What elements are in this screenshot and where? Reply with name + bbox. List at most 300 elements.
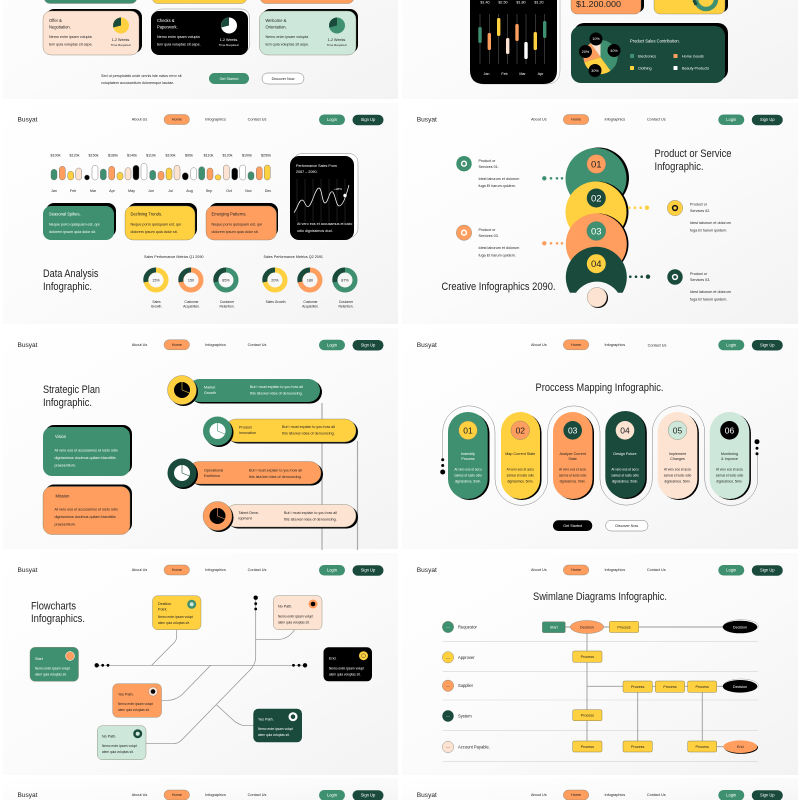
item: services 02: Product or bbox=[690, 202, 708, 206]
donut group: Q1 2090: Sales Performance Metrics Q1 2090 bbox=[144, 255, 203, 259]
candlestick chart bbox=[478, 14, 546, 64]
card: yes path orange bbox=[113, 684, 162, 717]
bar value labels: $120k bbox=[222, 154, 233, 158]
pie chart: 30% bbox=[591, 69, 599, 73]
card: yes path dark: atem quia voluptas sit. bbox=[258, 733, 290, 737]
card: checks and paperwork: Nemo enim ipsam volupta bbox=[157, 35, 201, 39]
bar value labels: $180k bbox=[108, 154, 118, 158]
nav: row 3 right: Contact Us bbox=[648, 343, 666, 347]
card: offer and negotiation: Nemo enim ipsam volupta bbox=[49, 35, 93, 39]
nav: row 4 left: Home bbox=[172, 568, 182, 572]
card: start: atem quia voluptas sit. bbox=[35, 672, 67, 676]
pill 02: dignissimos. 5min. bbox=[507, 480, 534, 484]
card: no path mint: No Path. bbox=[102, 734, 116, 738]
card: yes path orange: Nemo enim ipsam volupt bbox=[118, 702, 153, 706]
serpentine connector bbox=[440, 406, 760, 506]
item: services 02: fuga Et harum quidem. bbox=[690, 228, 727, 232]
pill 03: At vero eos et accu bbox=[559, 468, 587, 472]
panel: hiring steps slide bbox=[43, 0, 358, 85]
card: no path mint bbox=[97, 726, 146, 760]
item: services 03: fuga Et harum quidem. bbox=[478, 253, 516, 257]
panel: product sales contribution bbox=[571, 23, 728, 83]
panel: flowcharts slide bbox=[30, 596, 372, 760]
swimlane nodes: Process bbox=[581, 745, 594, 749]
text block: call to action copy bbox=[101, 74, 182, 85]
pill 04: At vero eos et accu bbox=[611, 468, 639, 472]
nav: row 2 right: Infographics bbox=[604, 118, 625, 122]
nav: row 2 right: Home bbox=[571, 118, 581, 122]
panel: swimlane slide bbox=[442, 591, 758, 761]
nav: row 4 left: About Us bbox=[132, 568, 147, 572]
item: services 01: Services 01. bbox=[478, 165, 499, 169]
title: strategic plan: Infographic. bbox=[43, 397, 92, 409]
pill 01: dignissimos. 5min. bbox=[455, 480, 481, 484]
month labels: Jul bbox=[168, 189, 173, 193]
card: welcome and orientation: Nemo enim ipsam volupta bbox=[266, 35, 309, 39]
row: talent development: But I must explain to you how all bbox=[284, 511, 337, 515]
donut group: Q1 2090: Retention. bbox=[219, 304, 235, 308]
title: product or service: Product or Service bbox=[654, 148, 732, 160]
legend: Product Sales Contribution. bbox=[630, 38, 680, 44]
bar value labels: $100k bbox=[242, 154, 252, 158]
nav: row 5 left: Busyat bbox=[18, 792, 38, 799]
card: welcome and orientation: Orientation. bbox=[266, 24, 287, 30]
card: no path mint: atem quia voluptas sit. bbox=[102, 750, 134, 754]
donut group: Q1 2090: Growth. bbox=[151, 304, 162, 308]
pill 05: dignissimos. 5min. bbox=[664, 480, 691, 484]
nav: row 5 right: Contact Us bbox=[647, 793, 666, 797]
text block: call to action copy: voluptatem accusantium doloremque laudan. bbox=[101, 81, 174, 85]
month labels: Jan bbox=[51, 189, 57, 193]
card: decision point: atem quia voluptas sit. bbox=[158, 621, 190, 625]
swimlane nodes: Process bbox=[696, 685, 709, 689]
month labels: Sep bbox=[206, 189, 212, 193]
donut group: Q2 2091: 20% bbox=[271, 278, 279, 282]
title: creative infographics: Creative Infographics 2090. bbox=[442, 281, 556, 293]
card: decision point: Desition bbox=[158, 602, 171, 606]
card: no path peach: No Path. bbox=[278, 604, 292, 608]
month labels: Feb bbox=[70, 189, 76, 193]
price labels bbox=[480, 0, 544, 4]
pill 03 bbox=[553, 412, 594, 500]
card: no path peach: atem quia voluptas sit. bbox=[278, 620, 310, 624]
nav: row 4 left: Sign Up bbox=[361, 568, 376, 573]
card: yes path orange: Yes Path. bbox=[118, 692, 134, 696]
nav: row 5 right: Login bbox=[726, 792, 737, 798]
pill 01: samus et iusto odio bbox=[454, 474, 482, 478]
title: data analysis: Data Analysis bbox=[43, 268, 99, 280]
circle stack: 01 bbox=[591, 160, 602, 170]
card: performance sales line chart: Performance Sales From bbox=[296, 164, 337, 168]
card: offer and negotiation bbox=[43, 9, 142, 55]
month labels: Feb bbox=[501, 72, 508, 76]
card: offer and negotiation: tem quia voluptas sit aspe. bbox=[49, 42, 93, 46]
donut group: Q1 2090: Sales bbox=[152, 300, 161, 304]
legend: Clothing bbox=[638, 66, 652, 70]
lane: account payable bbox=[442, 741, 490, 753]
nav: row 3 left: Home bbox=[172, 343, 182, 347]
pill 01: Indentify bbox=[461, 452, 475, 456]
item: services 03: Product or bbox=[478, 228, 496, 232]
button: get started black bbox=[553, 520, 592, 531]
legend: Beauty Products bbox=[682, 66, 709, 70]
pill 03: dignissimos. 5min. bbox=[560, 480, 586, 484]
item: services 01: fuga Et harum quidem. bbox=[478, 184, 516, 188]
item: services 03 dark bbox=[629, 269, 731, 301]
nav: row 2 right: Contact Us bbox=[647, 118, 666, 122]
pill 05: Changes bbox=[670, 457, 685, 461]
nav: row 2 left: Contact Us bbox=[248, 118, 266, 122]
card: emerging patterns: dolorem ipsum quia dolor sit. bbox=[212, 230, 259, 234]
title: data analysis bbox=[43, 268, 99, 293]
bar value labels: $100k bbox=[165, 154, 176, 158]
card: checks and paperwork: tem quia voluptas sit aspe. bbox=[157, 42, 201, 46]
month labels: Mar bbox=[90, 189, 97, 193]
donut group: Q1 2090: Customer bbox=[220, 300, 235, 304]
pill 01: At vero eos et accu bbox=[454, 468, 482, 472]
title: flowcharts: Infographics. bbox=[31, 613, 85, 625]
nav: row 5 right: Busyat bbox=[417, 792, 437, 799]
month labels: May bbox=[128, 189, 135, 193]
bar value labels: $110k bbox=[146, 154, 156, 158]
card: end: atem quia voluptas sit. bbox=[329, 672, 361, 676]
pill 01: 01 bbox=[463, 426, 473, 436]
nav: row 5 left: Home bbox=[172, 793, 182, 797]
card: emerging patterns: Emerging Patterns. bbox=[212, 212, 247, 216]
card: performance sales line chart: +28% bbox=[334, 187, 342, 191]
nav: row 4 right bbox=[417, 565, 783, 576]
pill 04: samus et iusto odio bbox=[611, 474, 639, 478]
panel: product or service slide bbox=[442, 148, 732, 308]
bar value labels: $250k bbox=[261, 154, 271, 158]
swimlane nodes bbox=[542, 620, 758, 754]
nav: row 3 left: Contact Us bbox=[248, 343, 266, 347]
title: data analysis: Infographic. bbox=[43, 281, 92, 293]
price labels: $1.40 bbox=[480, 0, 490, 4]
lane: approver: --- bbox=[446, 656, 451, 660]
card: revenue value bbox=[571, 0, 644, 14]
price labels: $1.20 bbox=[534, 0, 544, 4]
month labels: Aug bbox=[186, 189, 193, 193]
donut group: Q2 2091: 180 bbox=[307, 278, 313, 282]
nav: row 4 right: Busyat bbox=[417, 567, 437, 574]
card: offer and negotiation: Offer & bbox=[49, 18, 62, 23]
month labels bbox=[484, 72, 544, 76]
nav: row 4 right: Contact Us bbox=[647, 568, 666, 572]
swimlane nodes: Decision bbox=[733, 685, 747, 689]
title: flowcharts: Flowcharts bbox=[31, 600, 76, 612]
panel: data analysis slide bbox=[43, 154, 358, 308]
nav: row 3 right: Infographics bbox=[604, 343, 625, 347]
item: services 03: Services 03. bbox=[478, 234, 499, 238]
card: donut on yellow bbox=[654, 0, 728, 14]
card: declining trends bbox=[125, 203, 197, 240]
row: talent development: Talent Deve- bbox=[238, 511, 260, 515]
swimlane nodes: Decision bbox=[580, 626, 594, 630]
item: services 02: Services 02. bbox=[690, 209, 710, 213]
nav: row 5 left bbox=[18, 790, 384, 800]
row: market growth: But I must explain to you how all bbox=[250, 385, 303, 389]
row: market growth: Market bbox=[204, 386, 215, 390]
month labels: Oct bbox=[226, 189, 232, 193]
pill 06: & Improve bbox=[721, 457, 738, 461]
nav: row 3 right: Sign Up bbox=[760, 342, 775, 348]
price labels: $2.50 bbox=[498, 0, 508, 4]
item: services 03 dark: Product or bbox=[690, 272, 708, 276]
swimlane nodes: End bbox=[737, 745, 744, 749]
row: market growth: Growth bbox=[204, 391, 216, 395]
card: declining trends: dolorem ipsum quia dolor sit. bbox=[130, 230, 178, 234]
pie chart: 40% bbox=[610, 49, 618, 53]
card: declining trends: Neque porro quisquam est, qui bbox=[130, 222, 181, 226]
nav: row 4 right: Infographics bbox=[604, 568, 625, 572]
nav: row 5 left: Sign Up bbox=[361, 793, 376, 798]
pill 03: samus et iusto odio bbox=[559, 474, 587, 478]
nav: row 3 left bbox=[18, 340, 384, 350]
item: services 02 bbox=[628, 200, 731, 232]
card: checks and paperwork: 1-2 Weeks. bbox=[220, 38, 238, 42]
pill 02: samus et iusto odio bbox=[507, 474, 534, 478]
card: performance sales line chart: odio dignissimos duci. bbox=[297, 229, 333, 233]
card: seasonal spikes: dolorem ipsum quia dolor sit. bbox=[49, 230, 96, 234]
title: swimlane diagrams: Swimlane Diagrams Infographic. bbox=[533, 591, 667, 603]
card: decision point bbox=[152, 596, 201, 630]
card: checks and paperwork bbox=[151, 9, 250, 55]
nav: row 2 left: Busyat bbox=[18, 116, 38, 124]
row: operational excellence bbox=[168, 458, 323, 489]
nav: row 3 right: Busyat bbox=[417, 342, 437, 349]
pill 03: State bbox=[568, 457, 577, 461]
donut group: Q1 2090: 150 bbox=[188, 278, 194, 282]
nav: row 3 right: Home bbox=[571, 343, 581, 347]
pill 01 bbox=[448, 412, 490, 500]
pill 03: Analyze Current bbox=[559, 452, 586, 456]
item: services 02: Idest laborum et dolorum bbox=[690, 221, 731, 225]
swimlane nodes: Process bbox=[631, 685, 645, 689]
donut group: Q1 2090: Customer bbox=[184, 300, 200, 304]
lane separators and connectors bbox=[443, 627, 758, 761]
pill 06: dignissimos. 5min. bbox=[716, 480, 743, 484]
item: services 03 dark: Idest laborum et dolorum bbox=[690, 290, 731, 294]
lane: approver bbox=[442, 652, 475, 663]
card: mission: Mission bbox=[56, 494, 70, 498]
item: services 03 dark: Services 03. bbox=[690, 278, 710, 282]
card: offer and negotiation: Time Required. bbox=[111, 43, 131, 47]
bar value labels: $150k bbox=[88, 154, 99, 158]
title: strategic plan: Strategic Plan bbox=[43, 384, 100, 396]
swimlane nodes: Process bbox=[663, 685, 677, 689]
row: product innovation: Innovation bbox=[239, 431, 256, 435]
pill 02 bbox=[501, 412, 542, 500]
card: no path mint: Nemo enim ipsam volupt bbox=[102, 744, 137, 748]
row: market growth bbox=[168, 376, 322, 406]
pill 06: 06 bbox=[725, 426, 734, 436]
nav: row 4 right: About Us bbox=[531, 568, 547, 572]
card: seasonal spikes: Neque porro quisquam est, qui bbox=[49, 222, 100, 226]
nav: row 5 left: Contact Us bbox=[248, 793, 266, 797]
card: start bbox=[30, 647, 78, 681]
month labels: Jan bbox=[484, 72, 489, 76]
pill 01: Process bbox=[461, 457, 475, 461]
donut group: Q2 2091: Acquisition. bbox=[302, 304, 319, 308]
card: offer and negotiation: 1-2 Weeks. bbox=[112, 38, 130, 42]
button: get started: Get Started bbox=[220, 77, 238, 81]
card: welcome and orientation bbox=[260, 9, 358, 55]
circle stack: 04 bbox=[591, 259, 602, 270]
donut group: Q2 2091: Retention. bbox=[338, 304, 354, 308]
donut group: Q2 2091: Customer bbox=[339, 300, 354, 304]
pie chart: 20% bbox=[582, 50, 590, 54]
card: welcome and orientation: 1-2 Weeks. bbox=[328, 38, 346, 42]
lane: supplier bbox=[442, 680, 474, 691]
card: declining trends: Declining Trends. bbox=[130, 212, 162, 216]
pill 04: Design Future bbox=[613, 452, 637, 456]
bar value labels bbox=[50, 154, 271, 158]
row: operational excellence: Operational bbox=[204, 468, 223, 472]
button: discover now outline bbox=[606, 520, 648, 531]
swimlane nodes: Decision bbox=[733, 626, 747, 630]
nav: row 2 left bbox=[18, 114, 384, 125]
card: yes path orange: atem quia voluptas sit. bbox=[118, 708, 150, 712]
card: checks and paperwork: Paperwork. bbox=[157, 24, 178, 30]
lane: approver: Approver bbox=[458, 655, 475, 660]
lane: system: --- bbox=[446, 714, 451, 718]
nav: row 5 right: Sign Up bbox=[760, 793, 775, 798]
month labels bbox=[51, 189, 271, 193]
card: performance sales line chart bbox=[290, 154, 358, 240]
bar value labels: $120k bbox=[69, 154, 80, 158]
nav: row 4 right: Home bbox=[571, 568, 581, 572]
nav: row 4 left: Login bbox=[327, 568, 338, 572]
panel: candlestick phone card bbox=[470, 0, 560, 84]
circle stack: 03 bbox=[591, 226, 602, 238]
pill 06: At vero eos et accu bbox=[716, 468, 743, 472]
bar value labels: $140k bbox=[127, 154, 137, 158]
panel: process mapping slide bbox=[440, 382, 760, 531]
nav: row 4 left: Infographics bbox=[205, 568, 226, 572]
row: talent development bbox=[203, 502, 358, 532]
card: start: Start bbox=[35, 657, 43, 661]
nav: row 4 right: Sign Up bbox=[760, 568, 775, 573]
bar value labels: $100k bbox=[50, 154, 61, 158]
lane: system bbox=[442, 710, 472, 722]
nav: row 3 right: About Us bbox=[531, 343, 547, 347]
row: operational excellence: Exellence. bbox=[204, 474, 221, 478]
swimlane nodes: Process bbox=[581, 655, 594, 659]
card: performance sales line chart: At vero eos et accusamus et iusto bbox=[297, 222, 352, 226]
nav: row 3 left: Login bbox=[327, 342, 338, 347]
card: yes path dark: Yes Path. bbox=[258, 718, 274, 722]
nav: row 2 right: About Us bbox=[531, 118, 547, 122]
pill 02: Map Current State bbox=[505, 452, 535, 456]
button: discover now outline: Discover Now bbox=[615, 524, 639, 528]
nav: row 2 left: Sign Up bbox=[361, 117, 376, 122]
item: services 03 dark: fuga Et harum quidem. bbox=[690, 297, 727, 301]
row: operational excellence: But I must explain to you how all bbox=[249, 468, 302, 472]
button: get started bbox=[209, 73, 249, 84]
connector dots bbox=[94, 596, 307, 668]
row: product innovation: But I must explain to you how all bbox=[282, 425, 335, 429]
card: start: Nemo enim ipsam volupt bbox=[35, 666, 70, 670]
donut group: Q2 2091: Sales Growth. bbox=[266, 300, 286, 304]
card: checks and paperwork: Checks & bbox=[157, 18, 175, 23]
nav: row 2 right: Busyat bbox=[417, 116, 437, 124]
card: mission: praesentium. bbox=[54, 522, 76, 526]
card: end: Nemo enim ipsam volupt bbox=[329, 666, 364, 670]
card: yes path dark bbox=[253, 709, 302, 742]
pill 04 bbox=[605, 411, 647, 499]
price labels: $1.80 bbox=[516, 0, 526, 4]
card: seasonal spikes bbox=[43, 203, 116, 240]
card: vision: dignissimos ducimus quilam blanditiis bbox=[54, 456, 116, 460]
nav: row 3 right: Login bbox=[726, 342, 737, 347]
nav: row 2 left: Login bbox=[327, 117, 338, 122]
nav: row 2 left: Home bbox=[172, 118, 182, 122]
pie chart bbox=[579, 32, 620, 77]
pill 05: Implement bbox=[669, 452, 686, 456]
nav: row 2 left: Infographics bbox=[205, 118, 226, 122]
card: performance sales line chart: 2087 – 2090. bbox=[296, 170, 318, 174]
lane: requestor bbox=[442, 621, 478, 633]
item: services 01: Product or bbox=[478, 159, 496, 163]
month labels: Mar bbox=[519, 72, 526, 76]
card: decision point: Nemo enim ipsam volupt bbox=[158, 615, 193, 619]
title: process mapping: Proccess Mapping Infographic. bbox=[536, 382, 664, 394]
nav: row 4 left: Contact Us bbox=[248, 568, 266, 572]
row: product innovation bbox=[203, 416, 358, 447]
title: product or service bbox=[654, 148, 732, 173]
swimlane nodes: Process bbox=[696, 745, 709, 749]
card: vision: praesentium. bbox=[54, 464, 76, 468]
donut group: Q1 2090: Acquisition. bbox=[183, 304, 200, 308]
legend: Electronics bbox=[638, 54, 656, 58]
flow connectors bbox=[96, 597, 305, 744]
lane: system: System bbox=[458, 714, 472, 718]
bar value labels: $110k bbox=[204, 154, 214, 158]
nav: row 5 right: Home bbox=[571, 793, 581, 797]
nav: row 2 right: Login bbox=[726, 117, 737, 122]
nav: row 5 right: About Us bbox=[531, 793, 547, 797]
swimlane nodes: Process bbox=[581, 714, 594, 718]
nav: row 3 left: About Us bbox=[132, 343, 147, 347]
connector lines bbox=[322, 403, 358, 550]
nav: row 4 left bbox=[18, 565, 384, 576]
card: vision bbox=[43, 425, 132, 476]
swimlane nodes: Start bbox=[550, 626, 558, 630]
donut group: Q2 2091: 87% bbox=[341, 278, 349, 282]
lane: account payable: --- bbox=[446, 746, 451, 750]
text block: call to action copy: Sed ut perspiciatis unde omnis iste natus error sit bbox=[101, 74, 182, 78]
card: mission: dignissimos ducimus quilam blanditiis bbox=[54, 515, 116, 519]
row: operational excellence: this ista ken idea of denouncing. bbox=[249, 475, 302, 479]
pill 05 bbox=[658, 412, 699, 500]
nav: row 2 right bbox=[417, 114, 783, 125]
circle stack: 02 bbox=[591, 194, 602, 204]
button: discover now: Discover Now bbox=[272, 77, 295, 81]
card: mission: At vero eos et accusamus et iusto odio bbox=[54, 508, 118, 512]
nav: row 5 right bbox=[417, 790, 783, 800]
donut group: Q2 2091: Sales Performance Metrics Q2 2091 bbox=[264, 255, 323, 259]
lane: supplier: Supplier bbox=[458, 683, 474, 688]
pill 02: 02 bbox=[516, 426, 525, 436]
nav: row 3 right bbox=[417, 340, 783, 350]
card: vision: Vision bbox=[55, 434, 67, 439]
month labels: Dec bbox=[265, 189, 271, 193]
title: strategic plan bbox=[43, 384, 100, 409]
month labels: Apr bbox=[538, 72, 544, 76]
nav: row 3 left: Infographics bbox=[205, 343, 226, 347]
pill 04: 04 bbox=[620, 426, 630, 436]
